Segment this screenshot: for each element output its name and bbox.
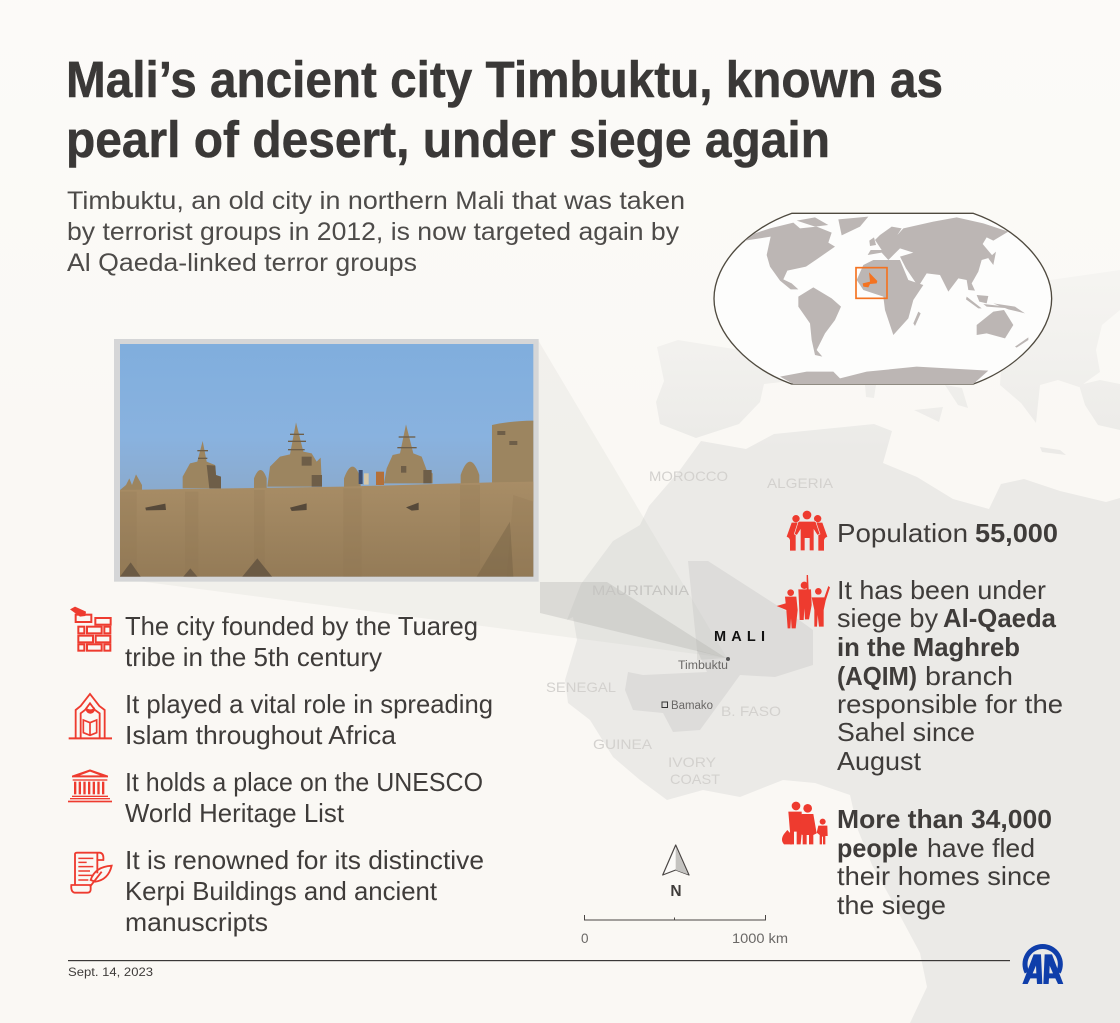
subtitle (67, 187, 685, 277)
fact: siege: responsible for the (837, 689, 1063, 719)
scale bar: 0 (581, 931, 589, 946)
fact: population: Population (837, 518, 968, 548)
sky (120, 344, 533, 577)
photo frame (114, 339, 539, 582)
scale bar: 1000 km (732, 931, 788, 946)
title: Mali’s ancient city Timbuktu, known as (66, 51, 943, 108)
fact: Islam: Islam throughout Africa (125, 720, 397, 750)
fact: buildings: It is renowned for its distinctive (125, 845, 484, 875)
country labels: ALGERIA (767, 475, 834, 491)
locator world map (714, 213, 1052, 384)
fact: displaced: have fled (927, 833, 1035, 863)
fact: displaced: the siege (837, 890, 946, 920)
label: Mali: MALI (714, 629, 765, 645)
fact: Islam: It played a vital role in spreading (125, 689, 493, 719)
fact: siege: in the Maghreb (837, 632, 1020, 662)
continents (745, 217, 1028, 384)
fact: siege: It has been under (837, 575, 1046, 605)
list: history facts (125, 611, 493, 937)
fact: siege: (AQIM) (837, 661, 917, 691)
globe frame (714, 213, 1052, 384)
fact: siege (777, 575, 1063, 776)
subtitle: Al Qaeda-linked terror groups (67, 249, 417, 277)
icon: people (787, 511, 827, 551)
towers (120, 421, 533, 502)
icon: family fleeing (782, 802, 828, 844)
fact: UNESCO: World Heritage List (125, 798, 345, 828)
fact: buildings: manuscripts (125, 907, 268, 937)
locator square (856, 268, 887, 298)
footer rule (68, 960, 1010, 961)
callout cone from photo to Timbuktu (115, 340, 727, 660)
scale bar (581, 915, 788, 946)
fact: UNESCO (125, 767, 483, 828)
fact: siege: August (837, 746, 922, 776)
icon: bricks (70, 607, 111, 651)
country labels: SENEGAL (546, 679, 616, 695)
wall (120, 482, 533, 577)
icon: soldiers (777, 575, 830, 628)
shaded lower right (477, 522, 513, 577)
fact: Islam (125, 689, 493, 750)
fact: displaced: their homes since (837, 861, 1051, 891)
subtitle: Timbuktu, an old city in northern Mali that was taken (67, 187, 685, 215)
north arrow (663, 845, 689, 900)
people on roof (359, 470, 384, 485)
photo: Timbuktu mosque (114, 339, 539, 582)
Mali highlight (863, 272, 877, 287)
icon: mosque with book (69, 694, 112, 738)
background map: land (565, 270, 1120, 1023)
fact: population: 55,000 (975, 518, 1058, 548)
title (66, 51, 943, 168)
country labels: B. FASO (721, 703, 781, 719)
marker: Timbuktu: Timbuktu (678, 660, 728, 672)
country labels (546, 468, 834, 787)
fact: buildings: Kerpi Buildings and ancient (125, 876, 438, 906)
fact: buildings (125, 845, 484, 937)
fact: population (787, 511, 1058, 551)
icon: Anadolu Agency logo (1022, 947, 1063, 984)
fact: founded: The city founded by the Tuareg (125, 611, 478, 641)
wall beams (145, 503, 419, 511)
fact: displaced (782, 802, 1052, 920)
fact: displaced: people (837, 833, 918, 863)
fact: siege: Sahel since (837, 717, 975, 747)
lower roofs (120, 558, 272, 577)
country labels: COAST (670, 771, 720, 787)
wall buttresses (120, 485, 533, 577)
top fade (0, 0, 1120, 450)
north arrow: N (670, 883, 682, 900)
marker: Bamako: Bamako (671, 700, 713, 712)
fact: UNESCO: It holds a place on the UNESCO (125, 767, 483, 797)
title: pearl of desert, under siege again (66, 111, 830, 168)
country labels: IVORY (668, 754, 717, 770)
icon: scroll and feather (71, 853, 112, 893)
fact: founded: tribe in the 5th century (125, 642, 382, 672)
fact: siege: siege by (837, 603, 938, 633)
fact: siege: branch (925, 661, 1013, 691)
country labels: GUINEA (593, 736, 653, 752)
fact: siege: Al-Qaeda (943, 603, 1057, 633)
map: Mali (625, 561, 813, 732)
icon: UNESCO temple (68, 769, 112, 802)
subtitle: by terrorist groups in 2012, is now targeted again by (67, 218, 680, 246)
fact: displaced: More than 34,000 (837, 804, 1052, 834)
date: Sept. 14, 2023 (68, 965, 153, 979)
tower shadows (197, 431, 517, 488)
country labels: MAURITANIA (592, 582, 690, 598)
country labels: MOROCCO (649, 468, 728, 484)
fact: founded (125, 611, 478, 672)
